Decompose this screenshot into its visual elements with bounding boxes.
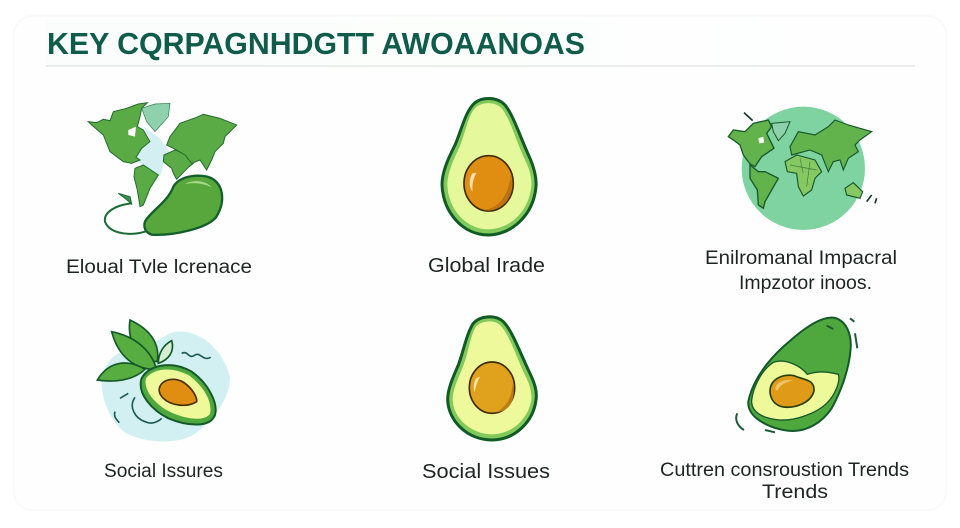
label: global trade: Global Irade (428, 255, 545, 277)
label: environmental impact: Enilromanal Impacral (705, 248, 897, 269)
label: environmental impact (705, 248, 897, 294)
label: social issues left: Social Issures (104, 461, 223, 482)
label: lifecycle: Eloual Tvle lcrenace (66, 257, 252, 278)
icon: world map with avocado (88, 103, 237, 235)
label: consumption trends: Trends (762, 482, 828, 503)
label: environmental impact: Impzotor inoos. (739, 273, 872, 294)
label: consumption trends: Cuttren consroustion Trends (660, 460, 909, 481)
icon: avocado half, global trade (442, 98, 536, 235)
icon: globe with continents (728, 107, 877, 230)
label: social issues center: Social Issues (422, 461, 550, 483)
title: KEY CQRPAGNHDGTT AWOAANOAS (47, 26, 585, 61)
icon: avocado with leaves (97, 320, 230, 442)
label: consumption trends (660, 460, 909, 503)
icon: avocado half, social issues (448, 317, 536, 440)
icon: tilted avocado half (736, 318, 857, 432)
